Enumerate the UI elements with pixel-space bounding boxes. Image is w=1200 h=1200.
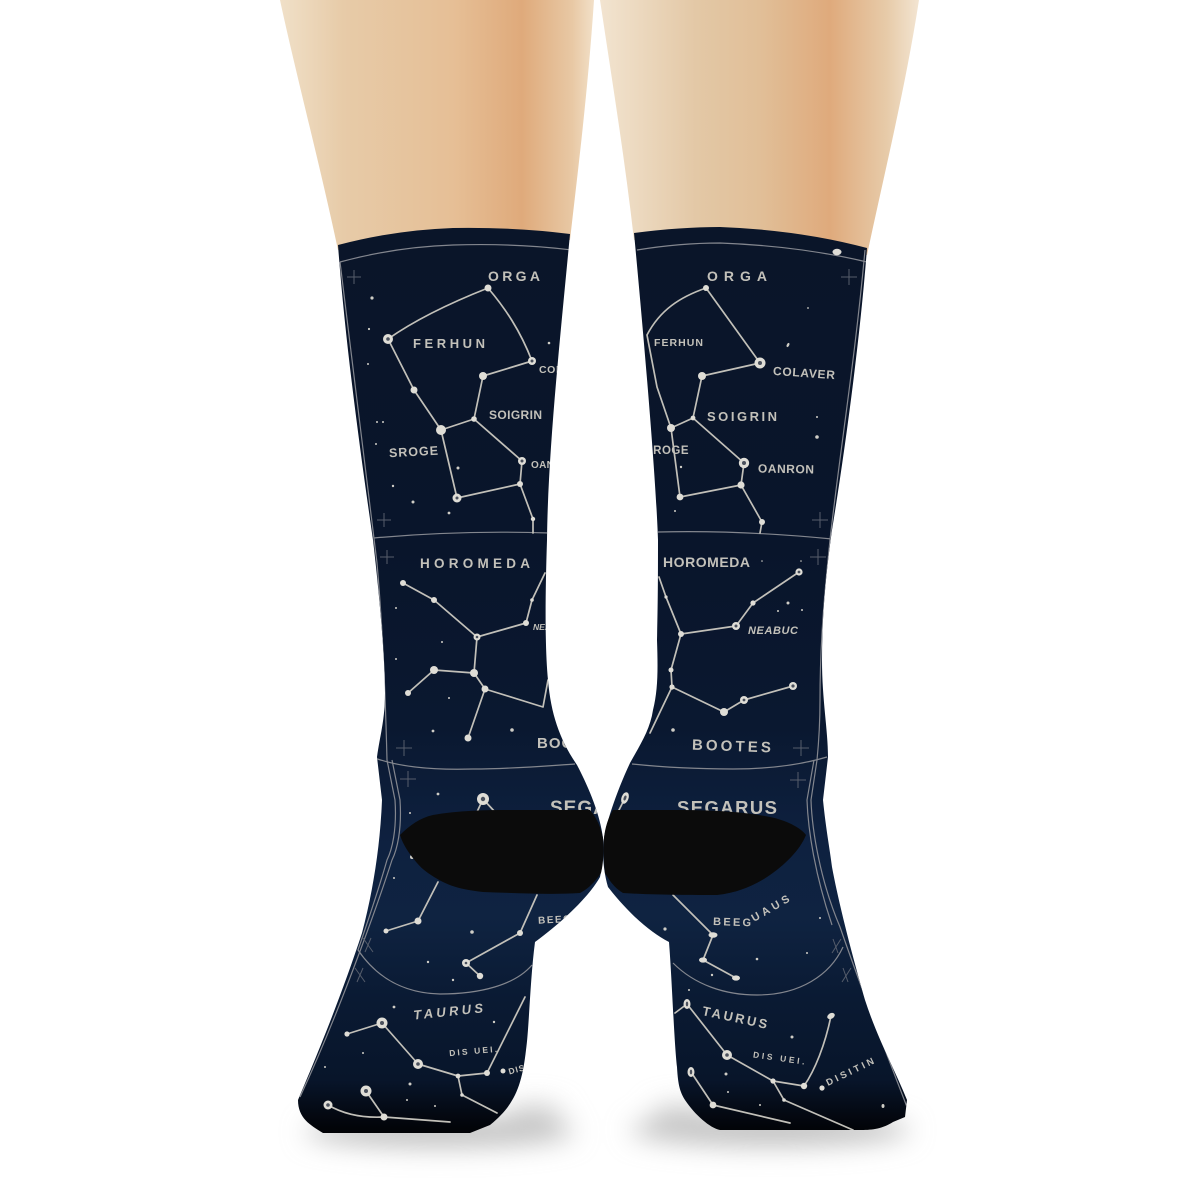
right heel patch xyxy=(604,810,806,895)
stars: upper left xyxy=(367,296,550,514)
labels: upper right: FERHUN xyxy=(654,337,703,349)
labels: middle right: HOROMEDA xyxy=(663,554,750,570)
labels: toe right: DISITIN xyxy=(824,1056,876,1089)
labels: upper left xyxy=(390,272,558,468)
constellation: Segarus left xyxy=(384,793,537,979)
constellation: Horomeda left xyxy=(400,573,548,742)
constellation: Segarus right xyxy=(618,791,740,981)
right sock xyxy=(603,227,907,1130)
labels: heel left: SEGARUS xyxy=(550,798,651,819)
labels: middle left: HOROMEDA xyxy=(420,556,530,571)
labels: heel left xyxy=(538,800,597,924)
labels: middle left xyxy=(420,558,566,748)
frame lines xyxy=(632,243,907,1107)
labels: upper left: ORGA xyxy=(488,268,540,284)
labels: heel left: BEEGUAUS xyxy=(538,912,607,927)
right leg xyxy=(600,0,919,255)
labels: upper right: OANRON xyxy=(758,462,814,476)
labels: upper right: SROGE xyxy=(645,445,689,457)
star: corner oval xyxy=(832,249,842,255)
right sock body xyxy=(603,227,907,1130)
plus marks: left xyxy=(347,270,416,787)
labels: upper left: COLAVER xyxy=(539,364,594,376)
stars: middle left xyxy=(324,607,514,1107)
floor shadows xyxy=(305,1104,910,1147)
labels: toe left: DIS UEI. xyxy=(449,1044,497,1058)
stars: upper right xyxy=(663,307,884,1108)
labels: heel right xyxy=(677,797,792,929)
labels: toe right: TAURUS xyxy=(701,1003,769,1032)
left heel patch xyxy=(400,810,603,894)
plus marks: right xyxy=(790,269,857,788)
labels: upper left: SROGE xyxy=(389,444,438,460)
labels: middle right: NEABUC xyxy=(748,625,799,637)
labels: upper right xyxy=(645,268,836,476)
labels: heel right: BEEG xyxy=(713,916,751,929)
constellation: Taurus left xyxy=(324,997,525,1122)
labels: upper left: FERHUN xyxy=(413,336,485,351)
cross marks: left xyxy=(355,938,373,982)
constellation: Horomeda and Bootes right xyxy=(650,568,803,733)
constellation: Orga and Colaver xyxy=(647,285,766,533)
cross marks: right xyxy=(832,939,851,982)
right sock chart print xyxy=(618,243,907,1130)
frame lines xyxy=(300,245,575,1097)
labels: heel right: SEGARUS xyxy=(677,797,777,818)
labels: toe right: DIS UEI. xyxy=(752,1049,805,1067)
labels: toe left xyxy=(414,1004,524,1074)
left sock chart print xyxy=(300,244,597,1123)
labels: toe right xyxy=(701,1003,876,1089)
left sock body xyxy=(298,228,603,1133)
labels: upper right: COLAVER xyxy=(773,364,836,382)
labels: toe left: DISITIN xyxy=(507,1057,546,1076)
labels: upper left: OANRON xyxy=(531,460,577,471)
labels: upper right: SOIGRIN xyxy=(707,409,777,424)
left sock xyxy=(298,228,604,1133)
labels: heel right: UAUS xyxy=(750,893,792,925)
left leg xyxy=(280,0,594,250)
labels: upper left: SOIGRIN xyxy=(489,408,542,422)
labels: middle left: NEABUC xyxy=(533,622,570,632)
labels: toe left: TAURUS xyxy=(413,1000,484,1023)
constellation: Taurus right xyxy=(675,999,853,1130)
labels: middle right: BOOTES xyxy=(692,737,771,756)
labels: upper right: ORGA xyxy=(707,268,767,284)
constellation: Orga and Ferhun xyxy=(383,284,536,533)
labels: middle left: BOOTES xyxy=(537,735,606,752)
labels: middle right xyxy=(663,554,799,756)
